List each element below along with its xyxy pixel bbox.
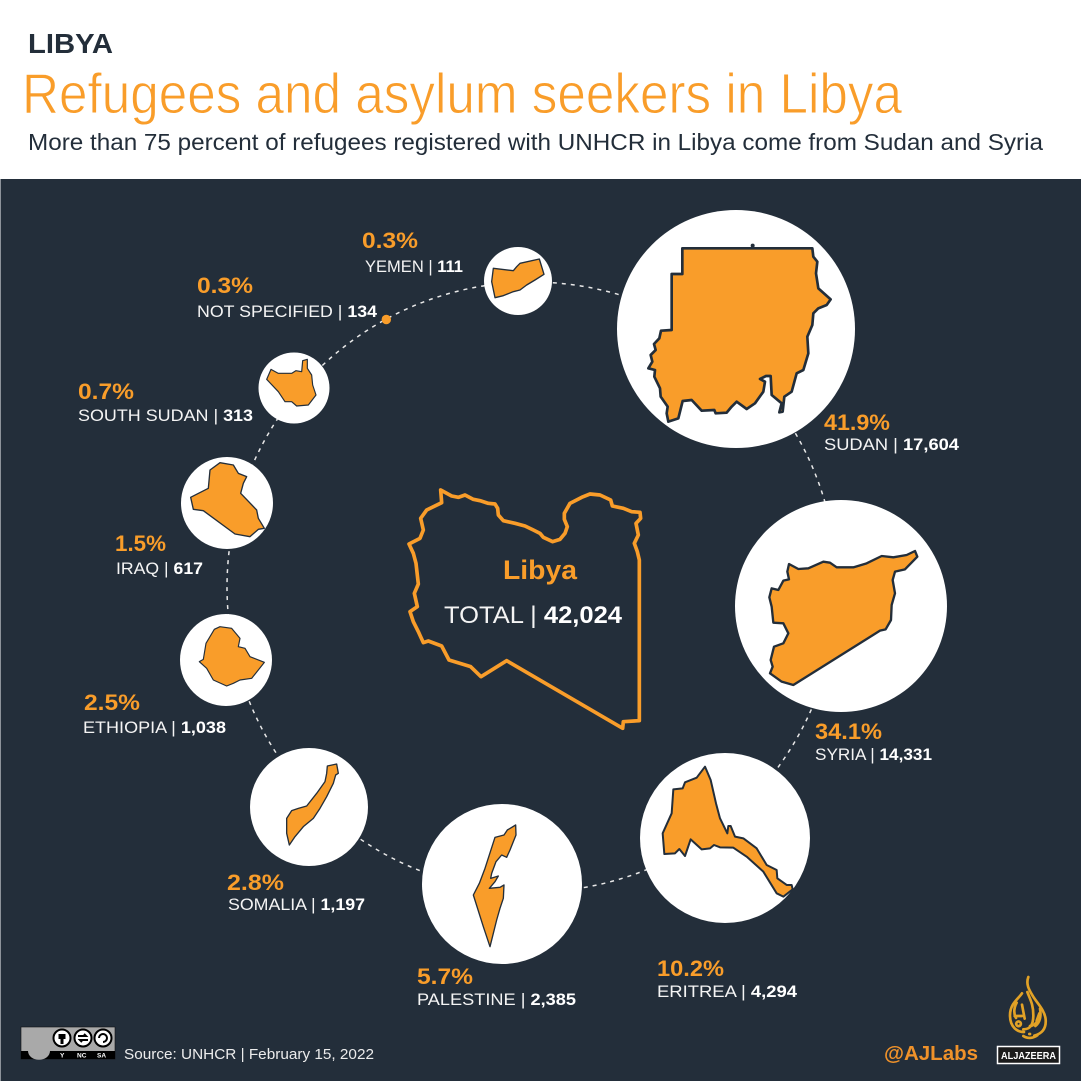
country: Syria <box>735 500 947 764</box>
country: Palestine: 5.7% <box>417 964 473 989</box>
heading: title: Refugees and asylum seekers in Libya <box>22 62 902 126</box>
country: Syria: 34.1% <box>815 719 882 744</box>
label: not specified: 0.3% <box>197 273 253 298</box>
country: Somalia <box>227 748 368 914</box>
text block: AJLabs handle: @AJLabs <box>884 1043 978 1065</box>
icon: Al Jazeera logo <box>998 977 1060 1064</box>
country: Iraq: 1.5% <box>115 531 166 556</box>
orbit: dashed ring linking countries <box>227 282 837 892</box>
text block: source: Source: UNHCR | February 15, 2022 <box>124 1047 374 1063</box>
country: Yemen <box>362 228 552 315</box>
country: South Sudan <box>78 352 330 425</box>
icon: Al Jazeera logo: ALJAZEERA <box>1001 1050 1056 1062</box>
country: Ethiopia: ETHIOPIA | 1,038 <box>83 719 226 737</box>
country: Palestine <box>417 804 582 1009</box>
label: not specified: NOT SPECIFIED | 134 <box>197 303 378 321</box>
icon: Creative Commons badge: SA <box>97 1052 106 1060</box>
country: Eritrea: 10.2% <box>657 956 724 981</box>
marker: not specified dot <box>382 315 391 324</box>
label: not specified <box>197 273 378 321</box>
icon: Creative Commons badge <box>21 1027 115 1060</box>
country: Somalia: SOMALIA | 1,197 <box>228 896 365 914</box>
heading: country tag: LIBYA <box>28 28 113 59</box>
country: Ethiopia <box>83 614 272 737</box>
icon: Creative Commons badge: NC <box>77 1052 87 1060</box>
country: Palestine: PALESTINE | 2,385 <box>417 991 576 1009</box>
country: Somalia: 2.8% <box>227 870 284 895</box>
country: Yemen: 0.3% <box>362 228 418 253</box>
label: Libya: Libya <box>503 555 578 585</box>
icon: Creative Commons badge: Y <box>60 1052 65 1060</box>
country: Yemen: YEMEN | 111 <box>365 258 463 276</box>
country: South Sudan: 0.7% <box>78 379 134 404</box>
text block: subtitle: More than 75 percent of refugees registered with UNHCR in Libya come from Sudan and Syria <box>28 129 1043 155</box>
country: Sudan: SUDAN | 17,604 <box>824 436 960 454</box>
label: total: TOTAL | 42,024 <box>444 602 623 629</box>
map: Libya outline <box>409 490 641 728</box>
country: Sudan: 41.9% <box>824 410 890 435</box>
country: Sudan <box>617 210 960 454</box>
country: Ethiopia: 2.5% <box>84 690 140 715</box>
country: Syria: SYRIA | 14,331 <box>815 746 932 764</box>
country: Iraq <box>115 457 273 578</box>
country: Iraq: IRAQ | 617 <box>116 560 203 578</box>
country: South Sudan: SOUTH SUDAN | 313 <box>78 407 253 425</box>
country: Eritrea <box>640 753 810 1001</box>
country: Eritrea: ERITREA | 4,294 <box>657 983 798 1001</box>
